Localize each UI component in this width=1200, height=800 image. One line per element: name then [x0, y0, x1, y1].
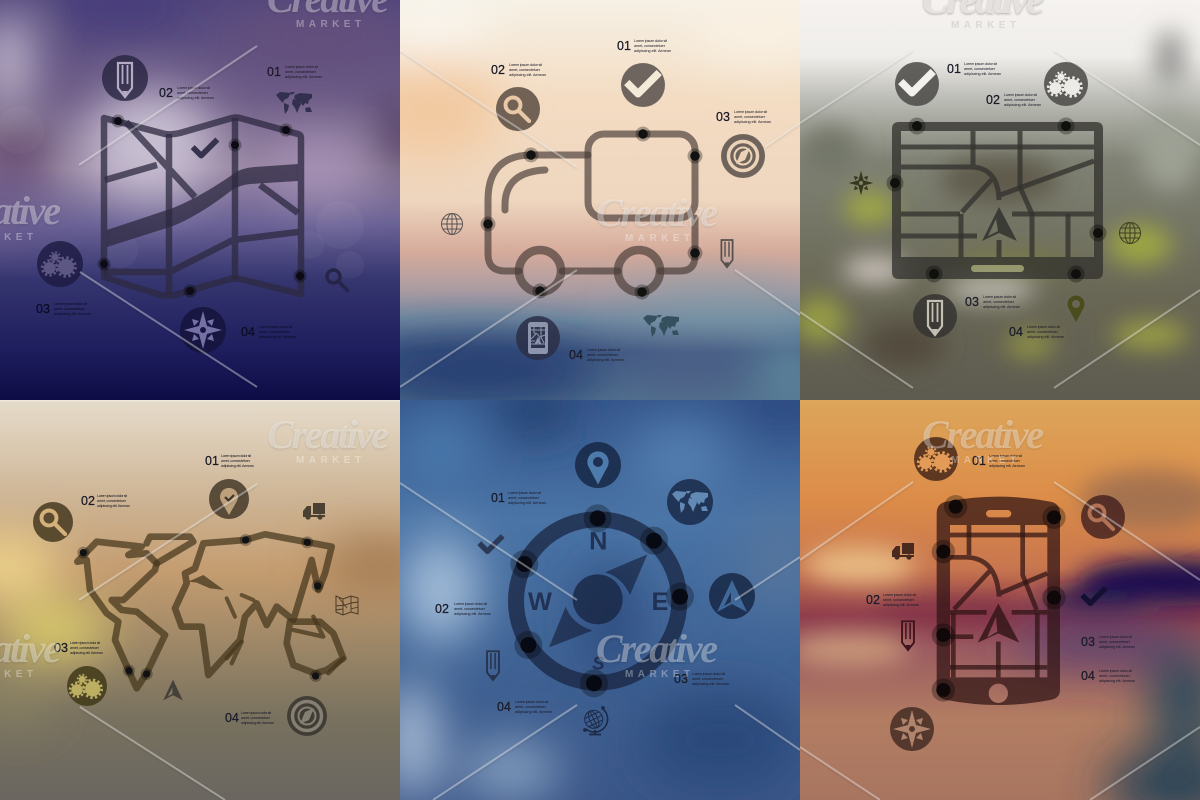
illustration: compass: E	[652, 588, 668, 616]
text block 03: adipiscing elit. Aenean	[692, 681, 729, 686]
text block 03: adipiscing elit. Aenean	[983, 304, 1020, 309]
text block 01: adipiscing elit. Aenean	[634, 48, 671, 53]
icon: magnifier	[327, 270, 348, 290]
text block 04: Lorem ipsum dolor sit	[587, 347, 621, 352]
text block 03: 03	[54, 641, 68, 655]
text block 04: 04	[569, 348, 583, 362]
text block 03	[716, 109, 771, 124]
watermark: Creative	[922, 412, 1044, 457]
text block 03: 03	[36, 302, 50, 316]
text block 01: 01	[947, 62, 961, 76]
text block 01: Lorem ipsum dolor sit	[634, 38, 668, 43]
text block 01: 01	[972, 454, 986, 468]
text block 01: amet, consectetuer	[221, 458, 251, 463]
icon: check badge	[895, 62, 939, 106]
text block 04: adipiscing elit. Aenean	[1099, 678, 1135, 683]
panel: GPS tablet infographic	[794, 0, 1200, 400]
text block 01	[617, 38, 671, 53]
illustration: truck	[488, 134, 695, 292]
panel: compass infographic	[388, 383, 835, 800]
text block 04	[1009, 324, 1064, 339]
icon: phone badge	[516, 316, 560, 360]
panel: delivery truck infographic	[400, 0, 800, 400]
text block 03	[1081, 634, 1135, 649]
text block 03: amet, consectetuer	[692, 676, 724, 681]
illustration: compass: S	[592, 652, 605, 673]
markers: phone nodes	[932, 495, 1066, 702]
icon: check mark on map	[193, 140, 217, 156]
text block 04	[497, 699, 552, 714]
text block 02: Lorem ipsum dolor sit	[97, 493, 128, 498]
text block 01: 01	[267, 65, 281, 79]
text block 02: amet, consectetuer	[97, 498, 127, 503]
text block 04: adipiscing elit. Aenean	[1027, 334, 1064, 339]
watermark lines	[400, 50, 800, 387]
icon: mini map	[336, 596, 358, 615]
icon: gears badge	[67, 666, 107, 706]
text block 03: Lorem ipsum dolor sit	[54, 301, 88, 306]
text block 01	[972, 453, 1025, 468]
text block 01: Lorem ipsum dolor sit	[285, 64, 319, 69]
text block 03: amet, consectetuer	[983, 299, 1015, 304]
text block 03: Lorem ipsum dolor sit	[70, 640, 101, 645]
text block 01: Lorem ipsum dolor sit	[964, 61, 998, 66]
text block 04: 04	[1081, 669, 1095, 683]
icon: globe	[442, 214, 462, 234]
icon: location pin	[1068, 296, 1084, 322]
watermark lines	[79, 46, 257, 387]
icon: pencil badge	[102, 55, 148, 101]
watermark: MARKET	[625, 233, 693, 244]
icon: gears badge	[914, 437, 958, 481]
icon: pencil	[902, 621, 914, 650]
watermark: MARKET	[951, 455, 1019, 466]
text block 04: 04	[241, 325, 255, 339]
text block 02: adipiscing elit. Aenean	[97, 503, 130, 508]
text block 01: adipiscing elit. Aenean	[285, 74, 322, 79]
text block 04: amet, consectetuer	[259, 329, 291, 334]
text block 04: Lorem ipsum dolor sit	[241, 710, 272, 715]
markers: world map nodes	[77, 534, 324, 682]
background: blurred sunset with dark navy band	[790, 400, 1200, 800]
panel: folded map infographic	[0, 0, 420, 400]
icon: magnifier badge	[33, 502, 73, 542]
icon: compass badge	[287, 696, 327, 736]
text block 04	[225, 710, 274, 725]
text block 03: adipiscing elit. Aenean	[734, 119, 771, 124]
text block 02: 02	[866, 593, 880, 607]
text block 04: Lorem ipsum dolor sit	[1099, 668, 1133, 673]
watermark top right: MARKET	[296, 455, 364, 466]
text block 01	[205, 453, 254, 468]
text block 03: amet, consectetuer	[1099, 639, 1131, 644]
text block 01: 01	[617, 39, 631, 53]
text block 04: Lorem ipsum dolor sit	[1027, 324, 1061, 329]
icon: world badge	[667, 479, 713, 525]
illustration: GPS tablet	[892, 122, 1103, 279]
text block 04: Lorem ipsum dolor sit	[259, 324, 293, 329]
text block 02	[866, 592, 919, 607]
icon: compass rose	[849, 171, 873, 195]
icon: navigation arrow	[163, 680, 183, 700]
text block 01: amet, consectetuer	[508, 495, 540, 500]
text block 01: 01	[205, 454, 219, 468]
text block 03: 03	[716, 110, 730, 124]
markers: truck nodes	[480, 126, 702, 300]
text block 02: amet, consectetuer	[454, 606, 486, 611]
watermark: MARKET	[951, 20, 1019, 31]
text block 01: amet, consectetuer	[964, 66, 996, 71]
text block 02: adipiscing elit. Aenean	[177, 95, 214, 100]
text block 04: adipiscing elit. Aenean	[587, 357, 624, 362]
illustration: smartphone with map	[937, 497, 1060, 705]
text block 04: amet, consectetuer	[515, 704, 547, 709]
text block 01: adipiscing elit. Aenean	[989, 463, 1025, 468]
watermark lines	[800, 50, 1200, 388]
text block 02: Lorem ipsum dolor sit	[177, 85, 211, 90]
text block 01	[947, 61, 1001, 76]
icon: check badge	[621, 63, 665, 107]
text block 03	[36, 301, 91, 316]
text block 03: amet, consectetuer	[54, 306, 86, 311]
illustration: folded map	[104, 118, 301, 296]
text block 01: Lorem ipsum dolor sit	[508, 490, 542, 495]
text block 04: 04	[1009, 325, 1023, 339]
text block 02: Lorem ipsum dolor sit	[509, 62, 543, 67]
text block 04	[569, 347, 624, 362]
icon: truck	[303, 503, 325, 520]
watermark lines	[79, 484, 257, 800]
text block 02	[435, 601, 491, 616]
text block 01: adipiscing elit. Aenean	[508, 500, 546, 505]
text block 03: Lorem ipsum dolor sit	[734, 109, 768, 114]
text block 03: 03	[1081, 635, 1095, 649]
text block 03: adipiscing elit. Aenean	[70, 650, 103, 655]
icon: pin badge	[575, 442, 621, 488]
text block 03	[674, 671, 729, 686]
illustration: compass: W	[528, 588, 552, 616]
text block 03: Lorem ipsum dolor sit	[1099, 634, 1133, 639]
markers: compass nodes	[510, 504, 694, 697]
watermark top right: MARKET	[296, 19, 364, 30]
text block 04: amet, consectetuer	[587, 352, 619, 357]
text block 01: 01	[491, 491, 505, 505]
text block 02: Lorem ipsum dolor sit	[454, 601, 488, 606]
icon: world map	[643, 315, 679, 337]
text block 01: Lorem ipsum dolor sit	[989, 453, 1023, 458]
watermark lines	[800, 482, 1200, 800]
background: blurred sunset gradient	[400, 0, 800, 400]
icon: desk globe	[582, 707, 608, 734]
text block 02: Lorem ipsum dolor sit	[1004, 92, 1038, 97]
panel: world map infographic	[0, 400, 440, 800]
icon: world map	[276, 92, 312, 114]
text block 01	[491, 490, 546, 505]
text block 01: amet, consectetuer	[989, 458, 1021, 463]
text block 02: 02	[491, 63, 505, 77]
text block 02: 02	[986, 93, 1000, 107]
icon: globe	[1120, 222, 1140, 244]
icon: check	[1082, 588, 1106, 603]
text block 03	[54, 640, 103, 655]
text block 04: amet, consectetuer	[241, 715, 271, 720]
icon: magnifier badge	[1081, 495, 1125, 539]
icon: compass rose badge	[890, 707, 934, 751]
text block 01: amet, consectetuer	[634, 43, 666, 48]
background: blurred blue stripes	[388, 383, 835, 800]
text block 02: adipiscing elit. Aenean	[509, 72, 546, 77]
text block 02: 02	[159, 86, 173, 100]
illustration: world map outline	[77, 534, 343, 688]
text block 04	[241, 324, 296, 339]
icon: pin check badge	[209, 479, 249, 519]
text block 02: 02	[435, 602, 449, 616]
text block 03: adipiscing elit. Aenean	[54, 311, 91, 316]
text block 03: 03	[674, 672, 688, 686]
markers: tablet nodes	[886, 118, 1106, 282]
text block 04: amet, consectetuer	[1027, 329, 1059, 334]
text block 03: Lorem ipsum dolor sit	[983, 294, 1017, 299]
text block 04: amet, consectetuer	[1099, 673, 1131, 678]
text block 02	[159, 85, 214, 100]
text block 04: adipiscing elit. Aenean	[515, 709, 552, 714]
text block 02: 02	[81, 494, 95, 508]
text block 02: amet, consectetuer	[509, 67, 541, 72]
illustration: compass: N	[589, 527, 607, 555]
text block 01: Lorem ipsum dolor sit	[221, 453, 252, 458]
text block 01	[267, 64, 322, 79]
panel: smartphone navigation infographic	[790, 400, 1200, 800]
text block 03: 03	[965, 295, 979, 309]
text block 03: amet, consectetuer	[70, 645, 100, 650]
background: blurred green landscape	[794, 0, 1200, 400]
watermark: Creative	[596, 190, 718, 235]
text block 04: 04	[225, 711, 239, 725]
icon: pencil	[487, 651, 499, 680]
text block 02	[81, 493, 130, 508]
text block 04	[1081, 668, 1135, 683]
icon: check	[479, 536, 503, 551]
text block 04: Lorem ipsum dolor sit	[515, 699, 549, 704]
icon: pencil badge	[913, 294, 957, 338]
icon: compass rose badge	[180, 307, 226, 353]
text block 01: adipiscing elit. Aenean	[221, 463, 254, 468]
text block 02: amet, consectetuer	[177, 90, 209, 95]
watermark top right: Creative	[267, 412, 389, 457]
icon: pencil	[721, 240, 733, 267]
text block 01: amet, consectetuer	[285, 69, 317, 74]
text block 03: amet, consectetuer	[734, 114, 766, 119]
text block 02: Lorem ipsum dolor sit	[883, 592, 917, 597]
icon: gears badge	[37, 241, 83, 287]
watermark: Creative	[596, 626, 718, 671]
text block 04: 04	[497, 700, 511, 714]
illustration: compass	[516, 519, 679, 683]
icon: magnifier badge	[496, 87, 540, 131]
watermark lines	[400, 483, 800, 800]
text block 02	[986, 92, 1041, 107]
text block 02: amet, consectetuer	[883, 597, 915, 602]
text block 03: Lorem ipsum dolor sit	[692, 671, 726, 676]
text block 04: adipiscing elit. Aenean	[241, 720, 274, 725]
icon: compass badge	[721, 134, 765, 178]
watermark: MARKET	[625, 669, 693, 680]
text block 02: adipiscing elit. Aenean	[883, 602, 919, 607]
text block 02	[491, 62, 546, 77]
text block 02: adipiscing elit. Aenean	[454, 611, 491, 616]
text block 01: adipiscing elit. Aenean	[964, 71, 1001, 76]
background: blurred purple bokeh	[0, 0, 420, 400]
markers: map nodes	[98, 114, 306, 298]
text block 02: amet, consectetuer	[1004, 97, 1036, 102]
icon: gears badge	[1044, 62, 1088, 106]
text block 03	[965, 294, 1020, 309]
text block 04: adipiscing elit. Aenean	[259, 334, 296, 339]
background: blurred desert gradient	[0, 400, 440, 800]
icon: arrow badge	[709, 573, 755, 619]
text block 03: adipiscing elit. Aenean	[1099, 644, 1135, 649]
icon: truck	[892, 543, 914, 560]
text block 02: adipiscing elit. Aenean	[1004, 102, 1041, 107]
